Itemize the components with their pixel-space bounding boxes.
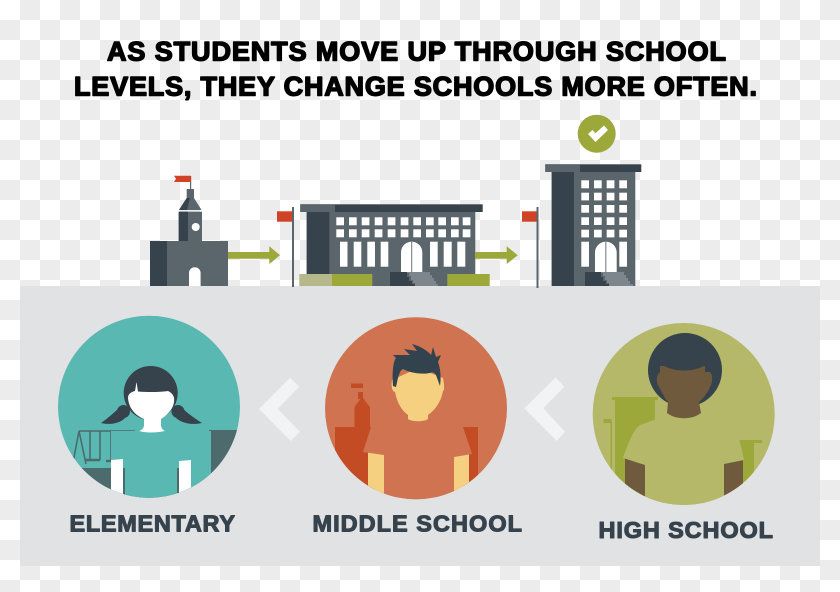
school background and swing set [73, 430, 237, 498]
face [128, 382, 174, 432]
elementary student illustration [58, 316, 240, 498]
school background [604, 397, 762, 502]
icon: green check badge [578, 115, 616, 153]
label: high school: HIGH SCHOOL [598, 517, 773, 543]
shirt [111, 431, 211, 500]
arms [111, 459, 191, 494]
arrow: middle to high [475, 246, 518, 264]
label: elementary: ELEMENTARY [70, 510, 235, 536]
icon: elementary school building [150, 176, 228, 286]
face and neck [657, 366, 712, 418]
school background [335, 384, 478, 490]
title [74, 36, 757, 102]
chevron: middle to elementary [259, 378, 300, 441]
arms [625, 458, 743, 496]
grey panel [20, 286, 820, 566]
shirt [623, 415, 744, 510]
title: AS STUDENTS MOVE UP THROUGH SCHOOL [107, 36, 726, 66]
high school student illustration [593, 323, 775, 510]
afro hair [648, 333, 722, 407]
face [392, 368, 444, 421]
arrow: elementary to middle [228, 246, 280, 264]
icon: high school building [545, 164, 641, 286]
arms [368, 452, 469, 494]
label: middle school: MIDDLE SCHOOL [312, 510, 522, 536]
icon: middle school building [299, 204, 490, 286]
icon: middle school flag [277, 207, 294, 287]
pigtails and hair [101, 366, 202, 424]
chevron: high to middle [524, 377, 565, 441]
icon: high school flag [522, 207, 538, 288]
title: LEVELS, THEY CHANGE SCHOOLS MORE OFTEN. [74, 72, 757, 102]
middle school student illustration [325, 317, 507, 507]
shirt [363, 427, 472, 505]
spiky hair [393, 344, 441, 387]
